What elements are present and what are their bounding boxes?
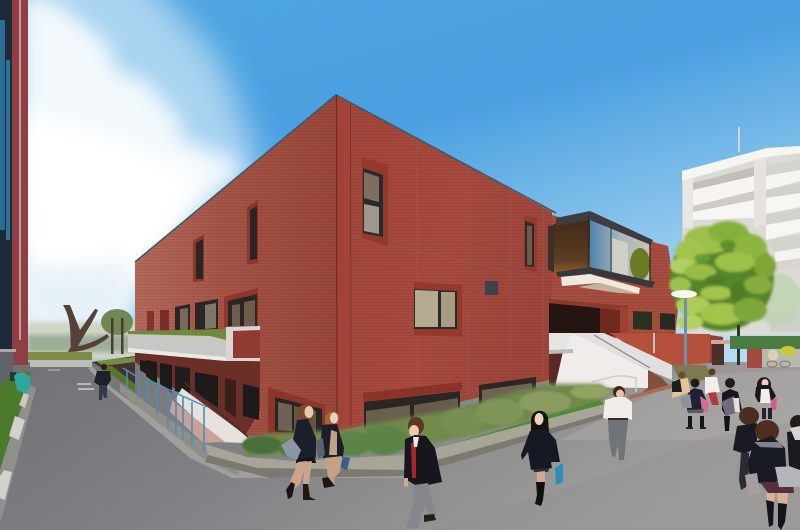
students group: girl far right in white shirt: [755, 377, 777, 419]
curved concrete planter wall: [205, 404, 605, 478]
students group: girl with handbag: [721, 378, 742, 431]
lower windows right face: [268, 377, 536, 438]
upper windows right face: [362, 157, 537, 337]
person: gardener in teal: [10, 366, 31, 394]
shrub planting along building: [242, 384, 612, 456]
street lamp: [671, 290, 697, 366]
student: girl with blue folder: [521, 411, 563, 506]
students group: girl with pink bag: [680, 378, 709, 429]
left kerb: [0, 385, 36, 520]
balcony: [128, 326, 260, 361]
right wing windows and lower wall: [610, 311, 762, 368]
sky: [0, 0, 800, 400]
distant trees and hedge: [28, 305, 138, 367]
glass box upper volume: [548, 211, 653, 281]
stair ramp and blue railings: [120, 368, 248, 476]
upper windows left face: [147, 200, 258, 331]
student: girl with long hair: [316, 412, 350, 488]
brick wall behind, right wing: [548, 214, 678, 338]
roof edge: [135, 95, 556, 262]
apartment building right: [682, 127, 800, 335]
student: boy with blazer: [404, 417, 442, 528]
tall building left edge: [0, 0, 28, 386]
students group: distant girl in white: [672, 368, 720, 405]
path markings and edge of road: [48, 366, 405, 478]
student: man in white shirt: [603, 386, 632, 460]
lower storey shadowed under balcony: [135, 352, 260, 436]
person: distant walker: [94, 364, 111, 400]
student: girl with shoulder bag: [281, 404, 316, 500]
main building right face: [336, 95, 552, 432]
corner pilaster: [336, 95, 351, 432]
wall and hedge left of the building: [92, 356, 135, 392]
entrance recess: [549, 299, 628, 337]
left garden bed: [0, 372, 30, 470]
students group: girl at right edge: [787, 415, 800, 470]
entrance stairs: [549, 333, 712, 399]
canopy under glass box: [556, 267, 655, 294]
students group: foreground girl brown hair: [733, 407, 759, 490]
ground shadow areas: [430, 370, 800, 530]
clouds: [20, 0, 260, 340]
students group: foreground girl with checked skirt: [745, 420, 800, 530]
back hedge and cyclist: [730, 336, 800, 367]
main building left face: [135, 95, 338, 436]
tree: [669, 221, 800, 365]
ground: road and plaza: [0, 362, 800, 530]
